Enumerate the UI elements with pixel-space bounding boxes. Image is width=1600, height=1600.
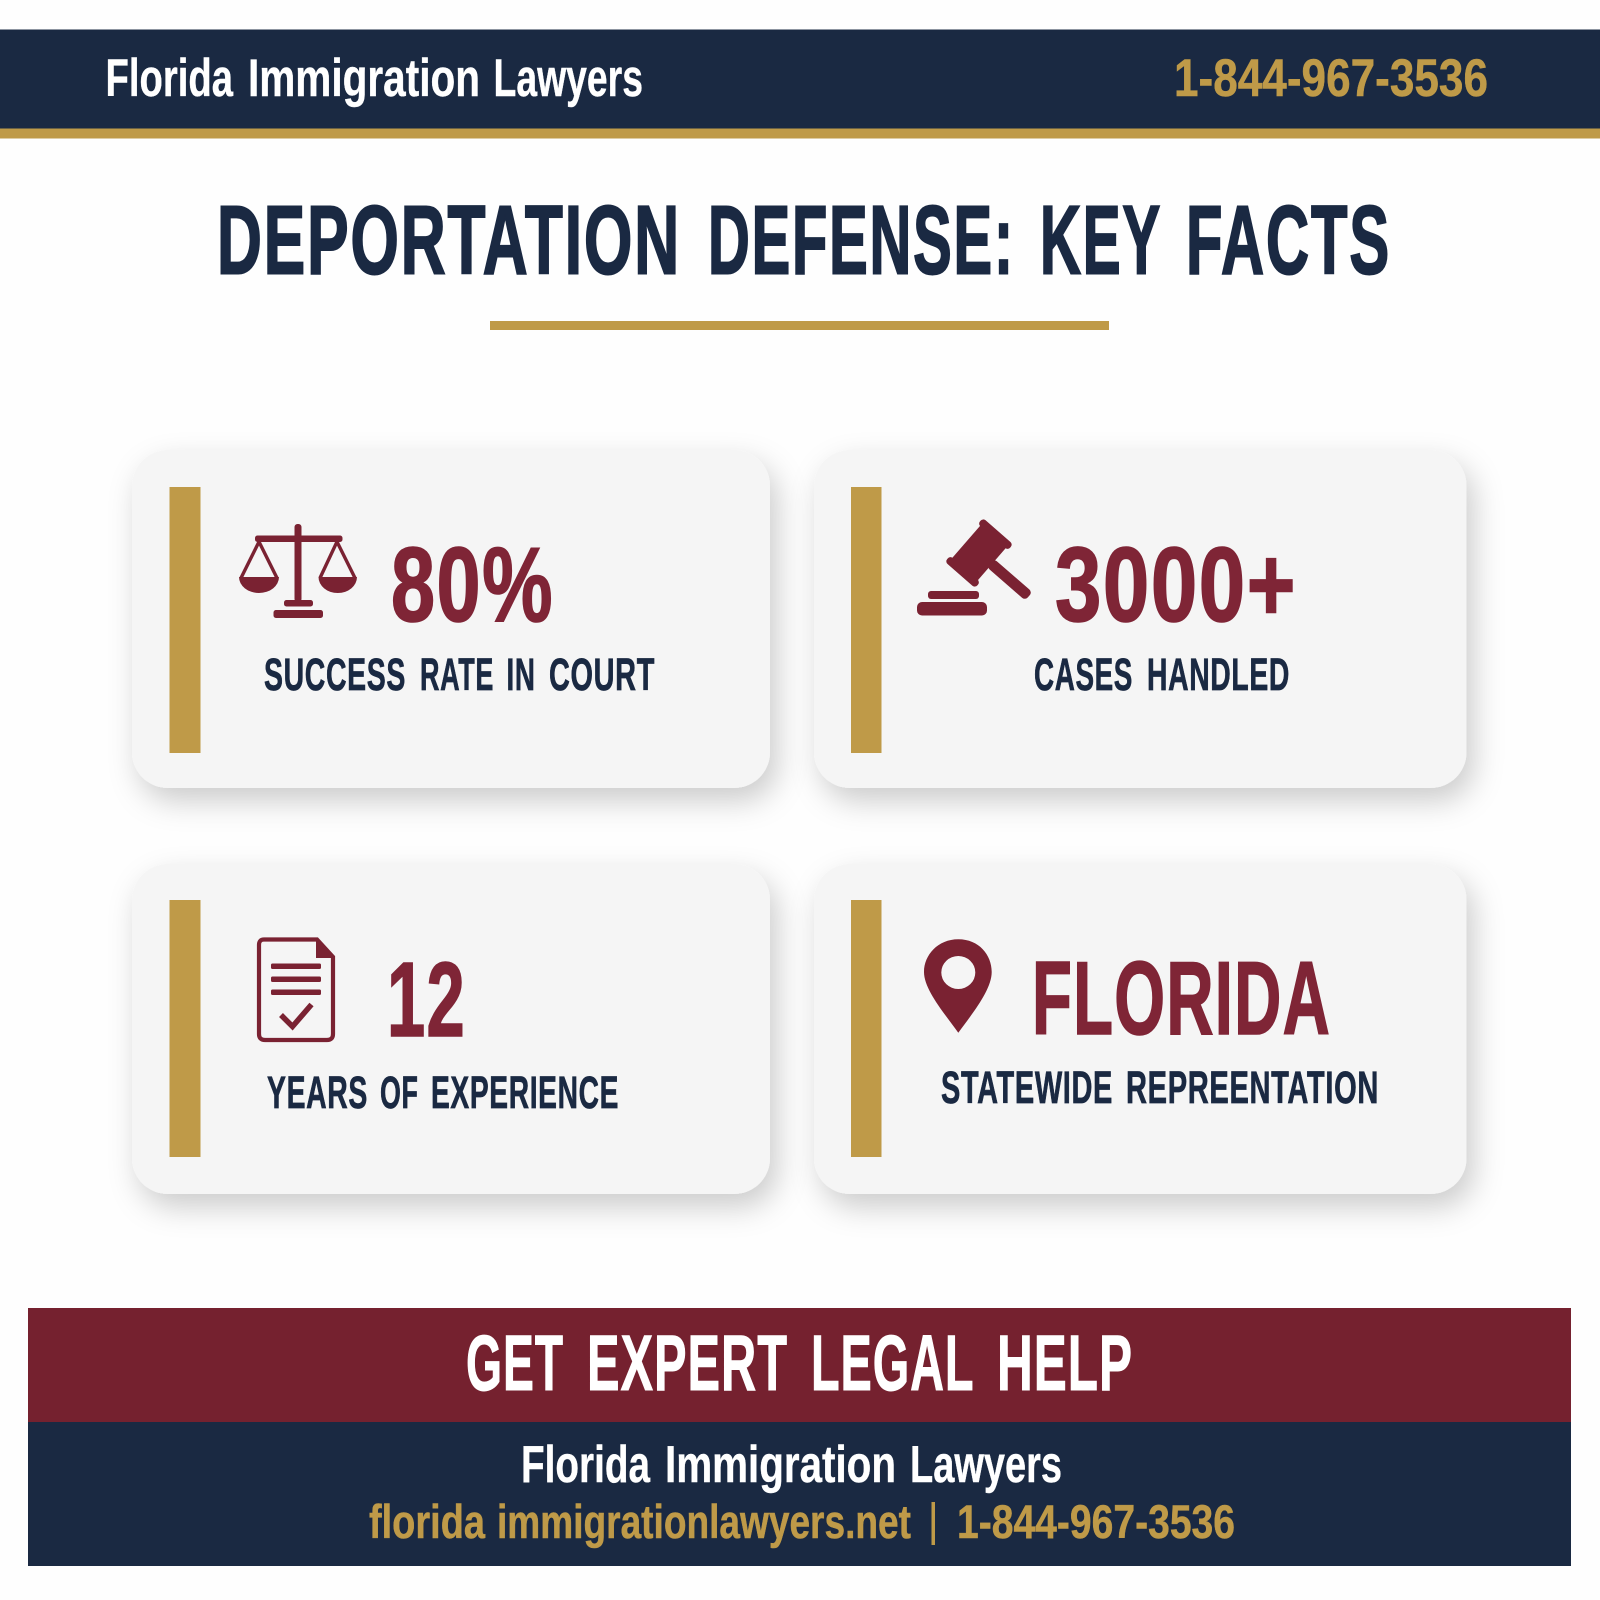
firm name: Florida — [106, 49, 233, 108]
statistic: 12: 12 — [387, 941, 466, 1059]
firm name — [106, 49, 643, 108]
website and phone: florida — [369, 1495, 486, 1548]
icon: gavel — [917, 518, 1048, 618]
call to action heading: LEGAL — [811, 1318, 974, 1407]
label: success rate in court: COURT — [549, 649, 655, 700]
call to action heading — [466, 1318, 1133, 1407]
phone number: 1-844-967-3536 — [1174, 49, 1488, 108]
icon: scales of justice — [239, 524, 357, 618]
label: years of experience: YEARS — [267, 1067, 368, 1118]
footer call to action — [28, 1308, 1571, 1566]
label: cases handled: HANDLED — [1147, 649, 1290, 700]
label: success rate in court — [264, 649, 655, 700]
firm name: Florida — [521, 1436, 651, 1494]
panel: success rate — [132, 450, 770, 788]
website and phone — [369, 1495, 1235, 1548]
icon: document with check — [259, 938, 335, 1040]
panel: years of experience — [132, 864, 770, 1194]
statistic: Florida: FLORIDA — [1032, 941, 1331, 1057]
title — [217, 186, 1391, 294]
label: years of experience: EXPERIENCE — [431, 1067, 619, 1118]
icon: map pin — [924, 939, 992, 1033]
title: DEPORTATION — [217, 186, 681, 294]
label: statewide representation: STATEWIDE — [941, 1062, 1113, 1113]
statistic: 80%: 80% — [391, 526, 554, 644]
label: statewide representation — [941, 1062, 1379, 1113]
title: FACTS — [1186, 186, 1391, 294]
statistic: 3000+: 3000+ — [1055, 526, 1297, 644]
firm name: Immigration — [248, 49, 480, 108]
firm name: Immigration — [665, 1436, 896, 1494]
label: years of experience: OF — [380, 1067, 418, 1118]
call to action heading: HELP — [997, 1318, 1133, 1407]
firm name: Lawyers — [494, 49, 643, 108]
label: cases handled — [1034, 649, 1290, 700]
header bar — [0, 30, 1600, 138]
firm name: Lawyers — [910, 1436, 1062, 1494]
title: KEY — [1040, 186, 1162, 294]
call to action heading: GET — [466, 1318, 564, 1407]
label: success rate in court: RATE — [420, 649, 494, 700]
website and phone: immigrationlawyers.net — [497, 1495, 911, 1548]
panel: cases handled — [814, 450, 1466, 788]
call to action heading: EXPERT — [587, 1318, 788, 1407]
panel: statewide representation — [814, 864, 1466, 1194]
label: success rate in court: IN — [506, 649, 536, 700]
label: statewide representation: REPREENTATION — [1126, 1062, 1379, 1113]
label: cases handled: CASES — [1034, 649, 1133, 700]
website and phone: 1-844-967-3536 — [957, 1495, 1235, 1548]
label: years of experience — [267, 1067, 619, 1118]
label: success rate in court: SUCCESS — [264, 649, 406, 700]
firm name — [521, 1436, 1062, 1494]
title: DEFENSE: — [708, 186, 1015, 294]
